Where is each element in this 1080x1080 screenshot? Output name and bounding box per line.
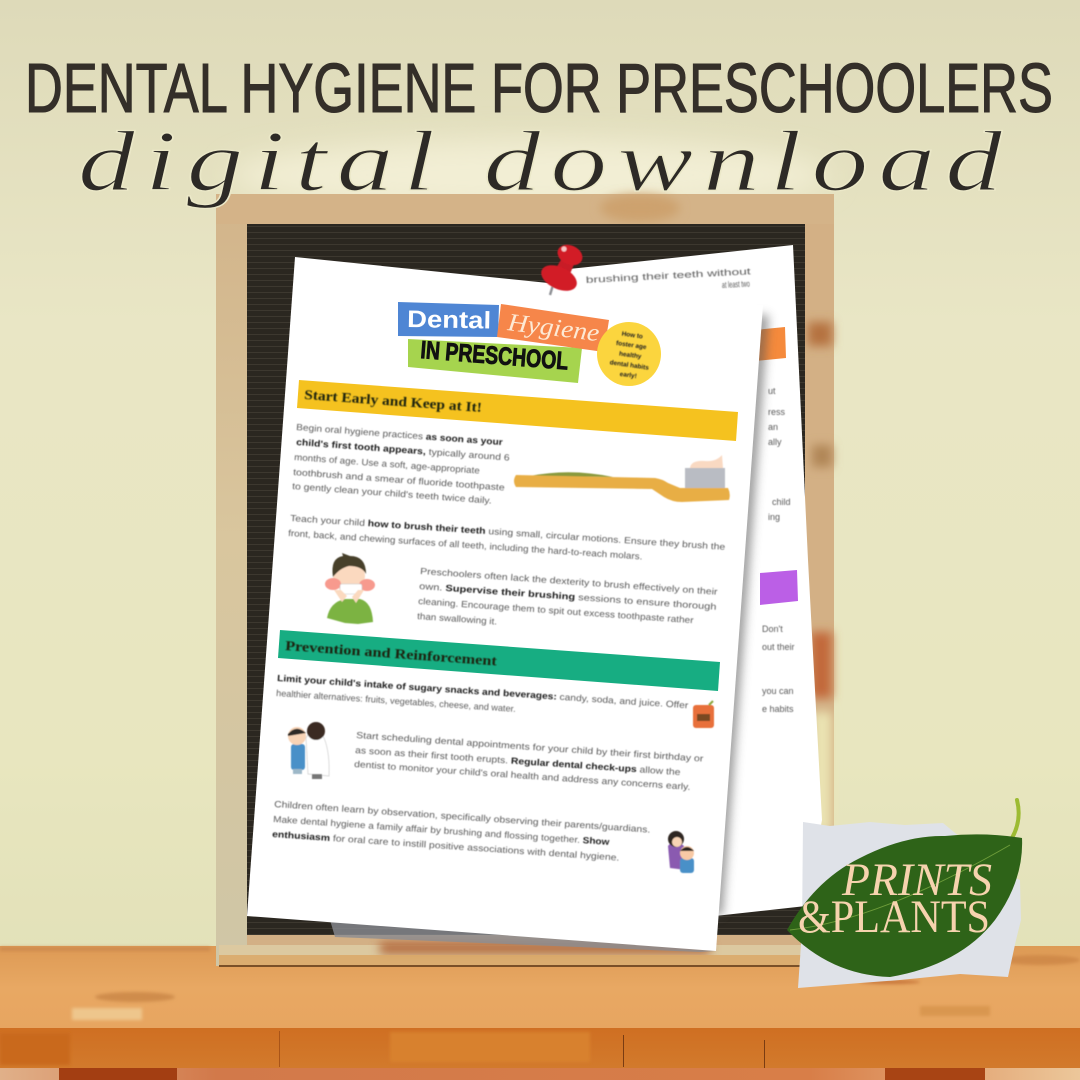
section heading: Start Early and Keep at It!: Start Early and Keep at It!: [304, 388, 482, 416]
text block: dental appointments: Start scheduling dental appointments for your child by their first birthday or: [356, 730, 704, 764]
section heading: Prevention and Reinforcement: [278, 630, 720, 691]
back page top text: brushing their teeth without: [586, 266, 752, 285]
logo: leaf with Prints and Plants: [787, 800, 1022, 977]
logo: Dental Hygiene in Preschool: healthy: [619, 350, 642, 361]
logo: leaf with Prints and Plants: &PLANTS: [798, 891, 990, 943]
back page text fragments: Don't: [762, 624, 783, 634]
text block: begin oral hygiene: months of age. Use a soft, age-appropriate: [294, 452, 480, 476]
text block: supervise brushing: than swallowing it.: [417, 611, 497, 627]
logo: Dental Hygiene in Preschool: Dental: [407, 306, 491, 334]
icon: toothbrush: [514, 455, 730, 502]
back page text fragments: you can: [762, 686, 794, 696]
text block: teach your child: front, back, and chewing surfaces of all teeth, including the hard-to-reach molars.: [288, 528, 643, 562]
back page text fragments: ally: [768, 437, 782, 447]
text block: children learn by observation: Children often learn by observation, specifically observing their parents/guardians.: [274, 799, 651, 835]
text block: dental appointments: dentist to monitor your child's oral health and address any concerns early.: [354, 759, 691, 792]
logo: Dental Hygiene in Preschool: foster age: [616, 340, 647, 351]
text block: begin oral hygiene: Begin oral hygiene practices as soon as your: [296, 422, 504, 447]
icon: dentist and child: [288, 722, 329, 779]
logo: Dental Hygiene in Preschool: early!: [619, 371, 637, 380]
back page: [560, 245, 822, 916]
back page text fragments: ut: [768, 386, 776, 396]
logo: Dental Hygiene in Preschool: dental habits: [609, 359, 650, 372]
back page orange bar: [755, 327, 786, 361]
text block: children learn by observation: enthusiasm for oral care to instill positive associations with dental hygiene.: [272, 829, 620, 863]
logo: Dental Hygiene in Preschool: Hygiene: [505, 309, 601, 347]
logo: Dental Hygiene in Preschool: How to: [621, 331, 643, 340]
back page text fragments: e habits: [762, 704, 794, 714]
icon: parent and child: [668, 831, 694, 873]
text block: supervise brushing: own. Supervise their brushing sessions to ensure thorough: [419, 581, 717, 612]
text block: begin oral hygiene: child's first tooth appears, typically around 6: [296, 437, 510, 463]
back page text fragments: child: [772, 497, 791, 507]
text block: dental appointments: [354, 730, 704, 792]
back page text fragments: out their: [762, 642, 795, 652]
text block: supervise brushing: Preschoolers often lack the dexterity to brush effectively on their: [420, 566, 718, 597]
back page text fragments: ing: [768, 512, 780, 522]
text block: limit sugary snacks: Limit your child's intake of sugary snacks and beverages: candy, soda, and juice. Offer: [277, 673, 689, 710]
back page text fragments: ress: [768, 407, 786, 417]
table: [0, 946, 1080, 1080]
text block: supervise brushing: [417, 566, 718, 627]
back page text fragments: at least two: [722, 279, 750, 290]
text block: children learn by observation: Make dental hygiene a family affair by brushing and flossing together. Show: [273, 814, 611, 847]
back page text fragments: an: [768, 422, 778, 432]
logo: Dental Hygiene in Preschool: [398, 302, 661, 386]
torn note paper: [798, 822, 1021, 988]
text block: begin oral hygiene: toothbrush and a smear of fluoride toothpaste: [293, 467, 505, 493]
section heading: Start Early and Keep at It!: [297, 380, 738, 441]
text block: begin oral hygiene: to gently clean your child's teeth twice daily.: [292, 481, 492, 506]
back page purple bar: [760, 570, 798, 605]
text block: children learn by observation: [272, 799, 651, 863]
logo: Dental Hygiene in Preschool: IN PRESCHOOL: [420, 336, 569, 376]
front page: [247, 257, 763, 952]
icon: child brushing teeth: [325, 553, 375, 624]
text block: begin oral hygiene: [292, 422, 510, 506]
icon: red push pin: [537, 241, 586, 296]
text block: teach your child: Teach your child how to brush their teeth using small, circular motions. Ensure they brush the: [290, 513, 726, 552]
icon: snacks: [693, 701, 714, 728]
subtitle script: digital download: [78, 113, 1003, 209]
logo: leaf with Prints and Plants: PRINTS: [841, 854, 992, 906]
text block: dental appointments: as soon as their first tooth erupts. Regular dental check-ups allow the: [355, 745, 681, 777]
back page text fragments: [722, 279, 795, 714]
text block: supervise brushing: cleaning. Encourage them to spit out excess toothpaste rather: [418, 596, 694, 625]
frame: [216, 194, 834, 967]
section heading: Prevention and Reinforcement: Prevention and Reinforcement: [285, 639, 498, 670]
text block: limit sugary snacks: healthier alternatives: fruits, vegetables, cheese, and water.: [276, 688, 516, 714]
